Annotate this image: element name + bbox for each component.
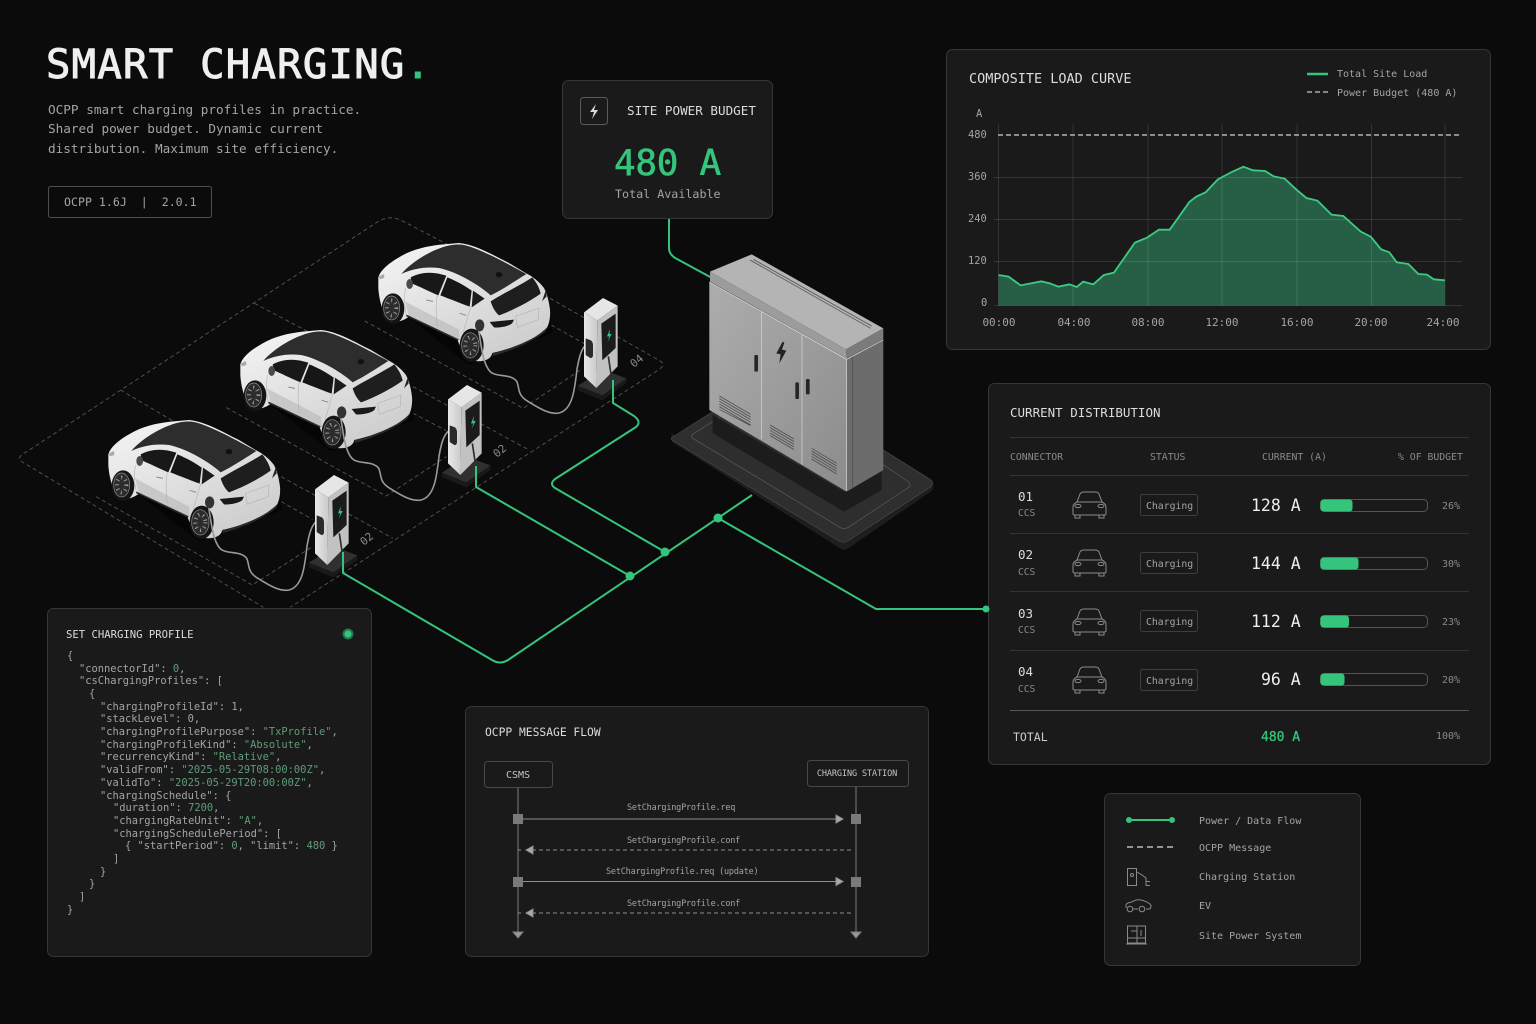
row: connector 02: 02 [1018, 547, 1033, 562]
bay numbers: 02 [491, 442, 509, 460]
json code: ] [113, 853, 119, 865]
row: connector 01: Charging [1146, 501, 1193, 512]
message labels: SetChargingProfile.conf [627, 836, 740, 846]
x axis labels: 16:00 [1280, 316, 1314, 329]
panel: set charging profile code [48, 608, 372, 956]
json code: "chargingRateUnit": "A", [113, 815, 263, 827]
line chart [994, 124, 1462, 306]
json code: "recurrencyKind": "Relative", [100, 751, 281, 763]
json code: { [67, 650, 73, 662]
charging station 04 [578, 298, 626, 400]
chart legend: Power Budget (480 A) [1337, 88, 1457, 99]
json code: "validTo": "2025-05-29T20:00:00Z", [100, 777, 313, 789]
json code: ] [79, 891, 85, 903]
panel: ocpp message flow [466, 706, 928, 956]
flow heading: OCPP MESSAGE FLOW [485, 726, 601, 739]
charging station box: CHARGING STATION [817, 769, 897, 779]
bay numbers: 02 [358, 530, 376, 548]
x axis labels: 24:00 [1426, 316, 1460, 329]
EV bay 02 [108, 420, 318, 590]
budget heading: SITE POWER BUDGET [627, 103, 756, 118]
json code: { [89, 688, 95, 700]
row: connector 03: Charging [1146, 617, 1193, 628]
bay numbers [358, 352, 646, 548]
json code: { "startPeriod": 0, "limit": 480 } [125, 840, 338, 852]
message labels: SetChargingProfile.conf [627, 899, 740, 909]
row: connector 04: 20% [1442, 675, 1460, 686]
legend: site power system [1126, 926, 1301, 944]
row: connector 01: 01 [1018, 489, 1033, 504]
x axis labels: 20:00 [1354, 316, 1388, 329]
x axis labels [982, 316, 1460, 329]
json code: "chargingProfileKind": "Absolute", [100, 739, 313, 751]
message labels [606, 803, 758, 909]
charging station 02 [309, 475, 357, 577]
y axis labels: 0 [981, 297, 987, 309]
row: connector 02: 30% [1442, 559, 1460, 570]
json code: "chargingSchedule": { [100, 790, 231, 802]
table header row: CURRENT (A) [1262, 452, 1327, 463]
legend: ev [1126, 900, 1211, 912]
row: connector 02: Charging [1146, 559, 1193, 570]
row: connector 04: 96 A [1261, 670, 1301, 689]
site power cabinet [671, 254, 933, 550]
lifelines [513, 787, 861, 938]
chart legend: Total Site Load [1337, 69, 1427, 80]
json code: "duration": 7200, [113, 802, 219, 814]
json code: "stackLevel": 0, [100, 713, 200, 725]
code heading: SET CHARGING PROFILE [66, 629, 194, 641]
title: SMART CHARGING. [46, 40, 431, 88]
legend: ev: EV [1199, 901, 1211, 912]
json code: } [67, 904, 73, 916]
panel: site power budget [562, 80, 772, 218]
total row: 480 A [1261, 730, 1300, 745]
row: connector 02 [1018, 547, 1460, 578]
row: connector 01: 128 A [1251, 496, 1301, 515]
json code: } [100, 866, 106, 878]
json code: "csChargingProfiles": [ [79, 675, 223, 687]
table header row: % OF BUDGET [1398, 452, 1463, 463]
connector to table node [982, 606, 990, 612]
activation squares [513, 814, 861, 887]
row: connector 04: CCS [1018, 684, 1036, 695]
y axis labels: 480 [968, 129, 987, 141]
version tag [48, 186, 212, 218]
legend: power flow: Power / Data Flow [1199, 816, 1302, 827]
legend: ocpp message: OCPP Message [1199, 843, 1271, 854]
total row [1013, 730, 1460, 745]
json code [67, 650, 338, 916]
y axis labels: 120 [968, 255, 987, 267]
row: connector 03: CCS [1018, 625, 1036, 636]
legend: power flow [1126, 816, 1302, 827]
panel: composite load curve [946, 50, 1490, 350]
x axis labels: 00:00 [982, 316, 1016, 329]
subtitle text block: Shared power budget. Dynamic current [48, 121, 323, 136]
csms box [484, 762, 552, 788]
status dot [344, 630, 352, 638]
budget caption: Total Available [615, 187, 721, 201]
subtitle text block: OCPP smart charging profiles in practice. [48, 102, 361, 117]
row: connector 04: Charging [1146, 676, 1193, 687]
row: connector 03: 112 A [1251, 612, 1301, 631]
json code: "chargingProfileId": 1, [100, 701, 244, 713]
row: connector 02: CCS [1018, 567, 1036, 578]
message labels: SetChargingProfile.req (update) [606, 867, 758, 877]
json code: "validFrom": "2025-05-29T08:00:00Z", [100, 764, 325, 776]
x axis labels: 12:00 [1205, 316, 1239, 329]
charging station box [808, 760, 908, 786]
panel: legend [1104, 794, 1360, 966]
total row: 100% [1436, 731, 1460, 742]
icon: lightning bolt [580, 98, 608, 124]
y axis labels: 360 [968, 171, 987, 183]
row: connector 03: 23% [1442, 617, 1460, 628]
row: connector 01 [1018, 489, 1460, 519]
json code: } [89, 878, 95, 890]
legend: site power system: Site Power System [1199, 931, 1301, 942]
legend: charging station: Charging Station [1199, 872, 1295, 883]
json code: "chargingSchedulePeriod": [ [113, 828, 282, 840]
row: connector 01: 26% [1442, 501, 1460, 512]
json code: "connectorId": 0, [79, 663, 185, 675]
row: connector 04: 04 [1018, 664, 1033, 679]
EV bay 04 [378, 243, 588, 413]
bay numbers: 04 [628, 352, 646, 370]
subtitle text block [48, 102, 361, 156]
version tag: OCPP 1.6J | 2.0.1 [64, 195, 197, 210]
row: connector 03 [1018, 606, 1460, 636]
EV bay 03 [240, 330, 450, 500]
table heading: CURRENT DISTRIBUTION [1010, 405, 1161, 420]
panel: current distribution [988, 384, 1490, 764]
row: connector 02: 144 A [1251, 554, 1301, 573]
subtitle text block: distribution. Maximum site efficiency. [48, 141, 338, 156]
y axis labels [968, 108, 987, 309]
x axis labels: 08:00 [1131, 316, 1165, 329]
parking bay grid [19, 218, 663, 607]
json code: "chargingProfilePurpose": "TxProfile", [100, 726, 338, 738]
x axis labels: 04:00 [1057, 316, 1091, 329]
chart legend [1307, 69, 1457, 99]
table header row: STATUS [1150, 452, 1185, 463]
csms box: CSMS [506, 770, 530, 781]
y axis labels: 240 [968, 213, 987, 225]
row: connector 04 [1018, 664, 1460, 695]
chart heading: COMPOSITE LOAD CURVE [969, 71, 1132, 87]
table header row: CONNECTOR [1010, 452, 1063, 463]
message labels: SetChargingProfile.req [627, 803, 735, 813]
table header row [1010, 452, 1463, 463]
power and data flow lines [343, 219, 986, 662]
legend: charging station [1128, 868, 1295, 886]
row: connector 01: CCS [1018, 508, 1036, 519]
budget value: 480 A [614, 143, 721, 184]
message arrows [518, 815, 853, 917]
charging station 03 [442, 385, 490, 487]
y axis labels: A [976, 108, 983, 120]
row: connector 03: 03 [1018, 606, 1033, 621]
total row: TOTAL [1013, 730, 1048, 744]
